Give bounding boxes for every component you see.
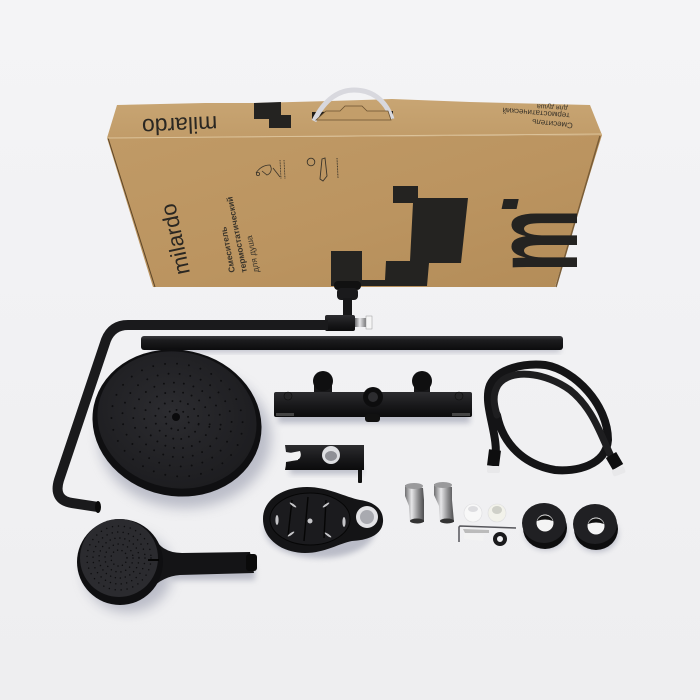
- front logo: milardo: [155, 201, 195, 277]
- front product name: для душа: [244, 234, 261, 274]
- flap black pixel block: [254, 102, 291, 128]
- white plastic bushings: [464, 504, 506, 522]
- shower hose: [487, 365, 626, 477]
- nozzle dots: [87, 526, 151, 590]
- black rosette right: [573, 504, 618, 550]
- box top flap: [107, 99, 602, 138]
- flap product name: термостатический: [502, 106, 570, 120]
- allen key, dowel and washer: [459, 526, 516, 544]
- soap dish: [263, 487, 383, 553]
- icon: no tool mixer: [307, 158, 338, 181]
- rain shower head: [79, 334, 275, 512]
- flap logo: milardo: [141, 111, 218, 140]
- hose ends: [493, 450, 495, 466]
- hand shower: [77, 519, 257, 605]
- front product name: [218, 196, 261, 274]
- black rosette left: [522, 503, 567, 549]
- chrome adapter fittings: [405, 482, 454, 524]
- riser rod: [141, 336, 563, 350]
- front product name: термостатический: [224, 196, 249, 274]
- thermostatic mixer: [274, 371, 472, 422]
- black pixel graphic: [331, 186, 468, 286]
- flap product name: [502, 102, 573, 130]
- pipe end cap: [95, 501, 101, 513]
- big m logo mark: m: [468, 209, 604, 272]
- panel: cardboard box: [107, 90, 604, 331]
- flap product name: Смеситель: [532, 117, 573, 130]
- box front face: [107, 135, 602, 287]
- sliding holder: [285, 445, 364, 483]
- soft shadows under parts: [84, 346, 618, 612]
- icon: hands: [256, 160, 285, 179]
- flap product name: для душа: [537, 102, 568, 111]
- box side fold lines: [107, 134, 602, 287]
- nozzle dots: [101, 352, 253, 488]
- front product name: Смеситель: [218, 226, 237, 274]
- carry handle: [312, 90, 393, 121]
- shower arm pipe: [58, 325, 328, 507]
- wall bracket with tee: [325, 281, 372, 331]
